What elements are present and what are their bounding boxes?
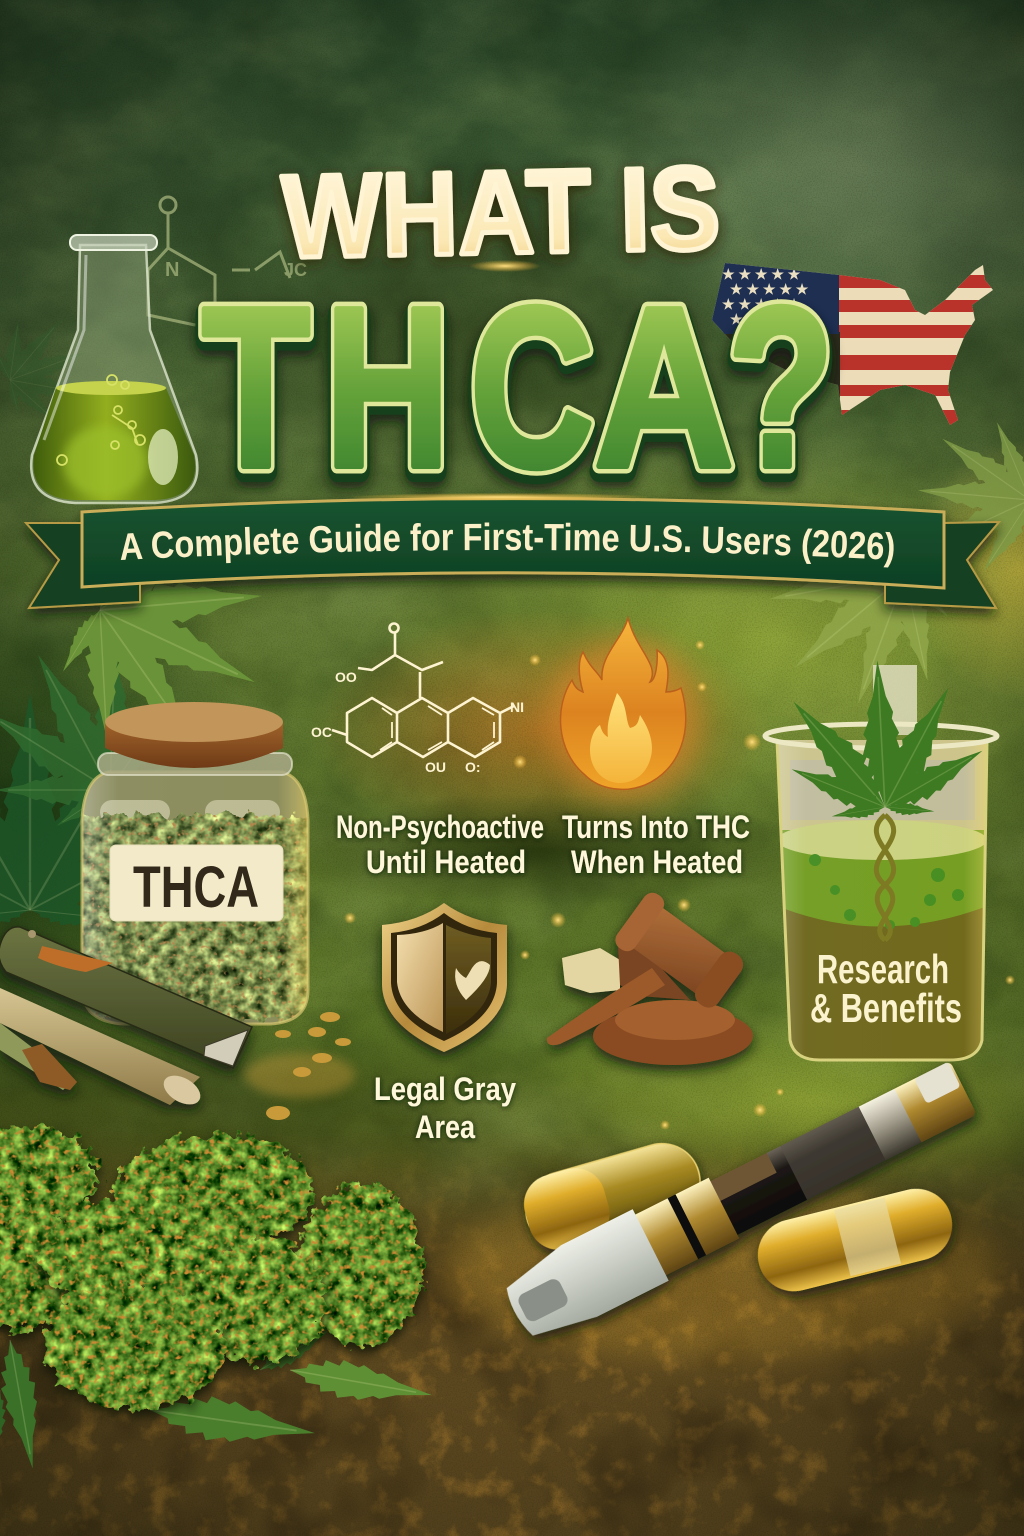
label: legal gray area: Area xyxy=(415,1109,475,1145)
title: thca: A xyxy=(594,266,734,520)
label: legal gray area xyxy=(374,1071,516,1145)
label: turns into thc xyxy=(562,809,750,880)
beaker with leaf xyxy=(765,659,997,1065)
flag map: ★ ★ ★ ★ ★ xyxy=(730,281,809,297)
molecule diagram: OC xyxy=(311,724,332,740)
title: thca: T xyxy=(202,261,310,515)
gold divider xyxy=(300,784,745,788)
rolled joints xyxy=(0,988,205,1110)
ribbon banner: A Complete Guide for First-Time U.S. Users (2026) xyxy=(120,522,894,568)
capsule left xyxy=(517,1135,709,1257)
title: thca: C xyxy=(470,261,594,515)
label: turns into thc: Turns Into THC xyxy=(562,809,750,845)
title: thca: H xyxy=(325,266,450,520)
title: thca xyxy=(202,261,834,520)
molecule diagram: OO xyxy=(335,669,357,685)
flame icon xyxy=(547,618,703,800)
beaker with leaf: Research xyxy=(817,946,949,992)
title: thca: T xyxy=(202,261,310,515)
gold crumbs xyxy=(245,1012,355,1120)
flag map: ★ ★ ★ ★ ★ xyxy=(722,266,801,282)
title: thca: H xyxy=(325,261,450,515)
title: thca: C xyxy=(470,266,594,520)
label: non-psychoactive xyxy=(336,809,544,880)
molecule diagram xyxy=(311,624,524,775)
title: thca: A xyxy=(594,261,734,515)
ribbon banner xyxy=(22,493,1004,623)
flask xyxy=(31,235,197,503)
title: thca: H xyxy=(325,261,450,515)
title: thca: ? xyxy=(728,261,834,515)
title: thca: A xyxy=(594,261,734,515)
label: turns into thc: When Heated xyxy=(571,844,743,880)
label: non-psychoactive: Non-Psychoactive xyxy=(336,809,544,845)
foreground leaves xyxy=(0,1320,435,1472)
flag map xyxy=(712,263,993,425)
flag map: ★ ★ ★ ★ ★ xyxy=(722,296,801,312)
gold sparkles xyxy=(344,640,1015,1130)
vape pen xyxy=(497,1052,981,1349)
title: thca: T xyxy=(202,266,310,520)
capsule right xyxy=(750,1181,960,1299)
title: thca: C xyxy=(470,261,594,515)
label: legal gray area: Legal Gray xyxy=(374,1071,516,1107)
vape device xyxy=(0,927,252,1068)
beaker with leaf: & Benefits xyxy=(810,985,962,1031)
molecule diagram: NI xyxy=(510,699,524,715)
decorative title line xyxy=(340,260,705,272)
background molecule sketch: N xyxy=(165,259,179,281)
background leaves xyxy=(0,298,1024,932)
gavel icon xyxy=(547,889,753,1065)
title: thca: ? xyxy=(728,261,834,515)
jar with THCA label: THCA xyxy=(133,855,259,920)
jar with THCA label xyxy=(70,702,320,1026)
shield icon xyxy=(382,903,507,1052)
flag map: ★ ★ ★ ★ ★ xyxy=(730,311,809,327)
background molecule sketch xyxy=(148,197,307,325)
cannabis buds pile xyxy=(0,1125,424,1410)
title: thca: ? xyxy=(728,266,834,520)
label: non-psychoactive: Until Heated xyxy=(366,844,526,880)
molecule diagram: O: xyxy=(465,759,481,775)
molecule diagram: OU xyxy=(425,759,446,775)
background molecule sketch: JC xyxy=(284,260,307,280)
title: what is: WHAT IS xyxy=(281,142,721,284)
